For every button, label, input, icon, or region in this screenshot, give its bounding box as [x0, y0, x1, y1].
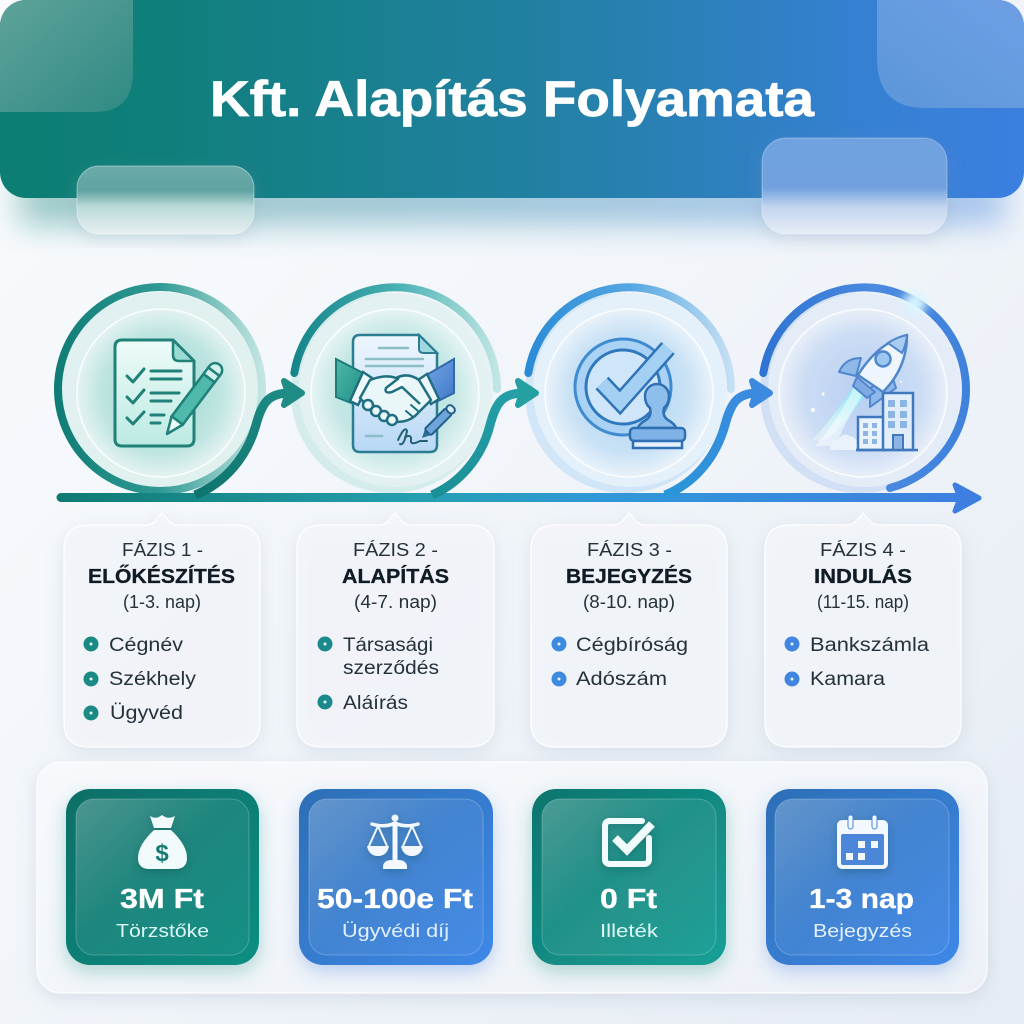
bullet list: Társasági [343, 635, 433, 656]
panel: key figures [37, 762, 987, 993]
icon: contract and handshake [336, 335, 456, 452]
bullet list [784, 635, 929, 690]
tile: registration time: 1-3 nap [809, 883, 914, 914]
tile: share capital: Törzstőke [116, 920, 209, 941]
card: phase 3 [531, 513, 727, 747]
card: phase 3: BEJEGYZÉS [566, 565, 692, 588]
card: phase 3: (8-10. nap) [583, 591, 675, 612]
card: phase 2: (4-7. nap) [354, 591, 437, 612]
tile: share capital: 3M Ft [120, 883, 204, 914]
card: phase 1: (1-3. nap) [123, 591, 201, 612]
card: phase 2: ALAPÍTÁS [342, 565, 449, 588]
phase 4 circle [760, 287, 966, 493]
tile: registration time: Bejegyzés [813, 920, 912, 941]
bullet list: Cégnév [109, 635, 184, 656]
icon: approved stamp [575, 339, 685, 448]
card: phase 1 [64, 513, 260, 747]
card: phase 1: ELŐKÉSZÍTÉS [88, 565, 235, 588]
tile: lawyer fee: Ügyvédi díj [342, 920, 449, 941]
tile: duty: Illeték [600, 920, 659, 941]
icon: rocket and office buildings [811, 335, 918, 450]
bullet list [84, 635, 197, 724]
title: Kft. Alapítás Folyamata [210, 71, 815, 127]
tile: duty [532, 789, 726, 965]
bullet list [552, 635, 688, 690]
glass decoration: top right [877, 0, 1024, 108]
bullet list: Adószám [576, 669, 667, 690]
card: phase 2 [297, 513, 494, 747]
card: phase 4: INDULÁS [814, 565, 912, 588]
glass decoration: bottom right [762, 138, 947, 234]
bullet list: Cégbíróság [576, 635, 688, 656]
bullet list: Ügyvéd [110, 703, 183, 724]
bullet list [318, 635, 439, 714]
phase 3 circle [525, 287, 731, 493]
card: phase 1: FÁZIS 1 - [122, 539, 203, 560]
card: phase 3: FÁZIS 3 - [587, 539, 672, 560]
icon: money bag [138, 815, 187, 869]
header banner [0, 0, 1024, 234]
icon: calendar [837, 815, 888, 869]
phase 1 circle [58, 287, 262, 492]
tile: lawyer fee [299, 789, 493, 965]
icon: check box [605, 821, 652, 864]
tile: registration time [766, 789, 959, 965]
main timeline arrow [61, 485, 979, 511]
tile: lawyer fee: 50-100e Ft [317, 883, 473, 914]
glass decoration: top left [0, 0, 133, 112]
card: phase 4 [765, 513, 961, 747]
arrow: phase 2 to phase 3 [432, 381, 536, 495]
icon: money bag: $ [155, 840, 169, 867]
bullet list: Bankszámla [810, 635, 929, 656]
arrow: phase 3 to phase 4 [665, 381, 770, 495]
card: phase 2: FÁZIS 2 - [353, 539, 438, 560]
bullet list: szerződés [343, 658, 439, 679]
bullet list: Kamara [810, 669, 885, 690]
card: phase 4: FÁZIS 4 - [820, 539, 906, 560]
bullet list: Aláírás [343, 693, 408, 714]
card: phase 4: (11-15. nap) [817, 591, 909, 612]
phase 2 circle [291, 287, 497, 493]
timeline process [58, 287, 979, 511]
bullet list: Székhely [109, 669, 197, 690]
icon: checklist and pencil [115, 340, 225, 446]
glass decoration: bottom left [77, 166, 254, 234]
tile: share capital [66, 789, 259, 965]
arrow: phase 1 to phase 2 [195, 381, 302, 495]
icon: scales [367, 814, 423, 869]
tile: duty: 0 Ft [600, 883, 657, 914]
